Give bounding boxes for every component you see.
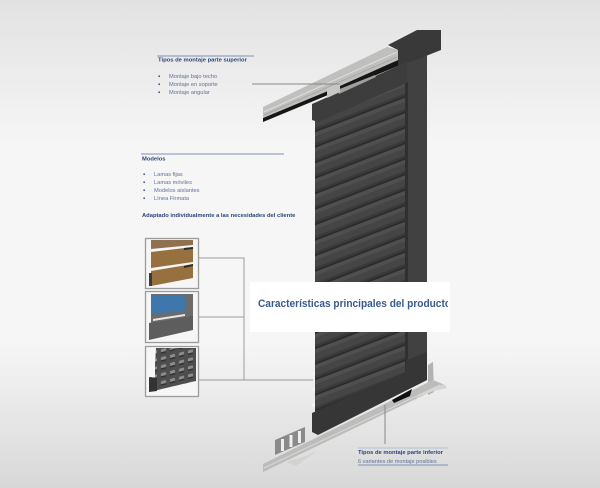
shutter illustration [263, 30, 447, 472]
panel: models: ▪ [143, 196, 145, 202]
callout: top mounting: ▪ [158, 82, 160, 88]
mounting clip [327, 75, 376, 98]
connector lines [199, 258, 313, 380]
thumbnail: blue slat [146, 292, 198, 342]
post inner edge [405, 82, 408, 372]
bottom rail [263, 362, 447, 472]
panel: models: ▪ [143, 172, 145, 178]
panel: models: Modelos aislantes [154, 188, 200, 194]
panel: models: ▪ [143, 180, 145, 186]
title text: Características principales del producto [258, 298, 451, 310]
panel: models: Línea Firmata [154, 196, 190, 202]
callout: top mounting: Montaje angular [169, 90, 210, 96]
subheading: tailored: Adaptado individualmente a las necesidades del cliente [142, 213, 296, 219]
thumbnail: wood slats [146, 238, 198, 288]
leader line: top mounting [252, 83, 340, 85]
panel: models: Modelos [142, 156, 166, 162]
panel: models [141, 154, 284, 202]
callout: top mounting [157, 56, 254, 96]
top head band [312, 62, 407, 122]
panel: models: Lamas móviles [154, 180, 192, 186]
top mounting rail [263, 47, 398, 122]
bottom band [312, 352, 427, 435]
callout: top mounting: Montaje bajo techo [169, 74, 217, 80]
callout: top mounting: ▪ [158, 90, 160, 96]
callout: top mounting: Montaje en soporte [169, 82, 218, 88]
louvre slats [315, 80, 407, 415]
panel: models: Lamas fijas [154, 172, 183, 178]
panel: models: ▪ [143, 188, 145, 194]
callout: bottom mounting [358, 448, 448, 465]
callout: bottom mounting: Tipos de montaje parte inferior [358, 450, 444, 456]
slat scallops [312, 124, 315, 412]
title panel [250, 282, 451, 332]
leader line: bottom mounting [384, 405, 386, 444]
bottom mounting plate [275, 427, 305, 455]
callout: top mounting: Tipos de montaje parte superior [158, 58, 248, 64]
thumbnail: mesh [146, 346, 198, 396]
top beam [388, 30, 441, 67]
callout: bottom mounting: 6 variantes de montaje posibles [358, 459, 437, 465]
callout: top mounting: ▪ [158, 74, 160, 80]
right post [407, 42, 427, 390]
